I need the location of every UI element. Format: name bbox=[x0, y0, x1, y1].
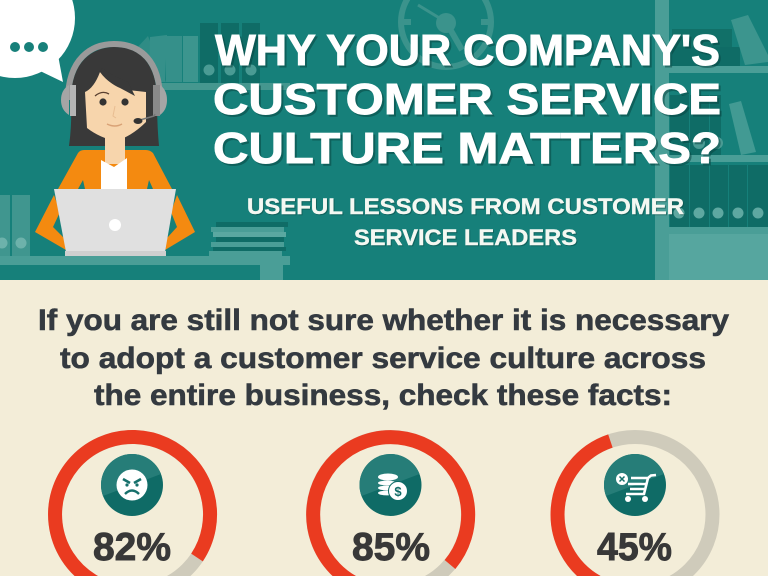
value 85%: 85% bbox=[352, 526, 430, 569]
desk bbox=[0, 256, 290, 280]
intro text: If you are still not sure whether it is necessary bbox=[38, 304, 729, 337]
face bbox=[85, 72, 146, 141]
lower arms bbox=[35, 195, 66, 250]
subtitle: USEFUL LESSONS FROM CUSTOMER bbox=[247, 194, 684, 219]
subtitle: SERVICE LEADERS bbox=[354, 225, 577, 250]
stack of books bbox=[209, 222, 288, 256]
subtitle bbox=[247, 194, 684, 250]
title: CULTURE MATTERS? bbox=[213, 124, 721, 173]
intro text bbox=[38, 304, 729, 412]
ring chart 45% bbox=[558, 437, 712, 576]
speech bubble bbox=[0, 0, 75, 82]
fringe bbox=[100, 68, 135, 96]
left bookshelf bbox=[135, 23, 290, 90]
laptop bbox=[54, 189, 176, 252]
headset bbox=[68, 44, 160, 100]
header banner bbox=[0, 0, 768, 280]
ring chart 85% bbox=[313, 437, 468, 576]
jacket and upper arms bbox=[58, 150, 172, 189]
icon: angry face bbox=[101, 454, 163, 516]
title bbox=[213, 26, 721, 173]
customer service agent bbox=[35, 44, 195, 256]
left folders bbox=[0, 195, 30, 256]
intro text: the entire business, check these facts: bbox=[94, 379, 672, 412]
wall clock bbox=[400, 0, 491, 67]
eyes bbox=[99, 98, 107, 106]
icon: coins bbox=[359, 454, 422, 516]
stat: 85% bbox=[313, 437, 468, 576]
icon: coins: $ bbox=[394, 484, 402, 499]
intro text: to adopt a customer service culture across bbox=[60, 342, 706, 375]
value 45%: 45% bbox=[597, 526, 672, 569]
ring chart 82% bbox=[55, 437, 210, 576]
icon: cart with cross bbox=[604, 454, 666, 516]
neck bbox=[105, 130, 125, 164]
right bookcase bbox=[655, 0, 768, 280]
value 82%: 82% bbox=[93, 526, 171, 569]
stat: 82% bbox=[55, 437, 210, 576]
hair bbox=[69, 47, 159, 146]
title: WHY YOUR COMPANY'S bbox=[215, 26, 720, 75]
title: CUSTOMER SERVICE bbox=[213, 75, 721, 124]
stat: 45% bbox=[558, 437, 712, 576]
shirt bbox=[101, 158, 127, 189]
